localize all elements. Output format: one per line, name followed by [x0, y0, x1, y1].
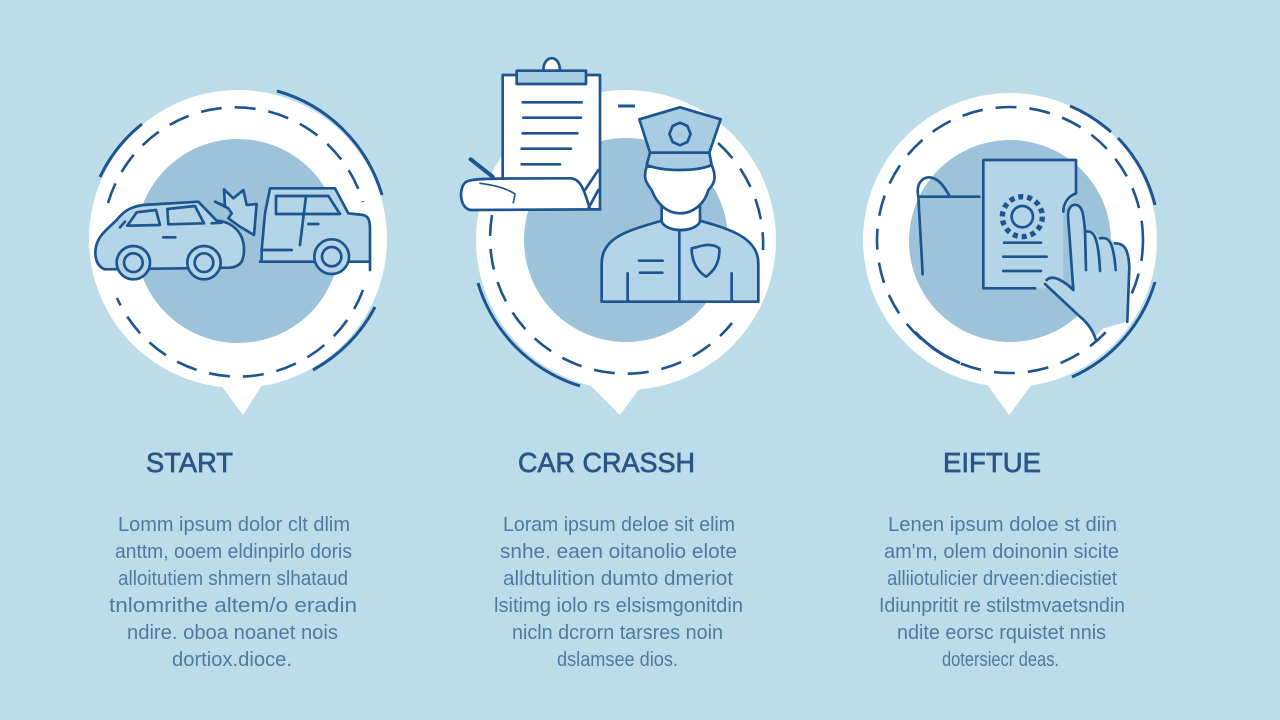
text block: car crash: snhe. eaen oitanolio elote: [500, 541, 737, 563]
text block: eiftue: [879, 514, 1125, 671]
text block: car crash: Loram ipsum deloe sit elim: [503, 514, 735, 536]
icon: police cap: [639, 107, 721, 170]
text block: start: dortiox.dioce.: [172, 649, 292, 671]
panel: eiftue: [863, 93, 1157, 671]
text block: car crash: lsitimg iolo rs elsismgonitdin: [494, 595, 743, 617]
text block: eiftue: alliiotulicier drveen:diecistiet: [887, 568, 1117, 590]
icon: document and hand: [918, 160, 1129, 340]
text block: eiftue: am'm, olem doinonin sicite: [884, 541, 1119, 563]
location pin badge: [476, 90, 776, 415]
icon: impact burst: [215, 189, 257, 235]
icon: front car: [95, 202, 244, 279]
location pin badge: [89, 90, 387, 415]
text block: car crash: alldtulition dumto dmeriot: [503, 568, 733, 590]
icon: certificate: [983, 160, 1076, 288]
text block: start: ndire. oboa noanet nois: [127, 622, 338, 644]
heading: eiftue: EIFTUE: [943, 447, 1041, 478]
icon: uniform: [602, 221, 758, 302]
icon: car collision: [95, 188, 370, 279]
text block: car crash: dslamsee dios.: [557, 649, 678, 671]
icon: clipboard: [503, 58, 600, 209]
text block: car crash: [494, 514, 743, 671]
text block: start: alloitutiem shmern slhataud: [118, 568, 348, 590]
icon: pointing hand: [1045, 205, 1129, 340]
icon: police officer: [602, 107, 758, 302]
text block: start: Lomm ipsum dolor clt dlim: [118, 514, 350, 536]
text block: start: [109, 514, 357, 671]
heading: start: START: [146, 447, 233, 478]
icon: folder: [918, 177, 979, 274]
location pin badge: [863, 93, 1157, 415]
text block: eiftue: Lenen ipsum doloe st diin: [888, 514, 1117, 536]
heading: car crash: CAR CRASSH: [518, 447, 695, 478]
icon: rear truck: [260, 188, 370, 274]
icon: uniform details: [628, 232, 732, 302]
text block: car crash: nicln dcrorn tarsres noin: [512, 622, 723, 644]
icon: clipboard and signature: [461, 58, 600, 210]
text block: start: tnlomrithe altem/o eradin: [109, 595, 357, 617]
text block: eiftue: ndite eorsc rquistet nnis: [897, 622, 1106, 644]
panel: car crash: [461, 58, 776, 671]
text block: eiftue: dotersiecr deas.: [942, 649, 1059, 671]
text block: eiftue: Idiunpritit re stilstmvaetsndin: [879, 595, 1125, 617]
panel: start: [89, 90, 387, 671]
text block: start: anttm, ooem eldinpirlo doris: [115, 541, 352, 563]
icon: neck and face: [662, 207, 700, 230]
icon: signature sheet: [461, 159, 600, 210]
